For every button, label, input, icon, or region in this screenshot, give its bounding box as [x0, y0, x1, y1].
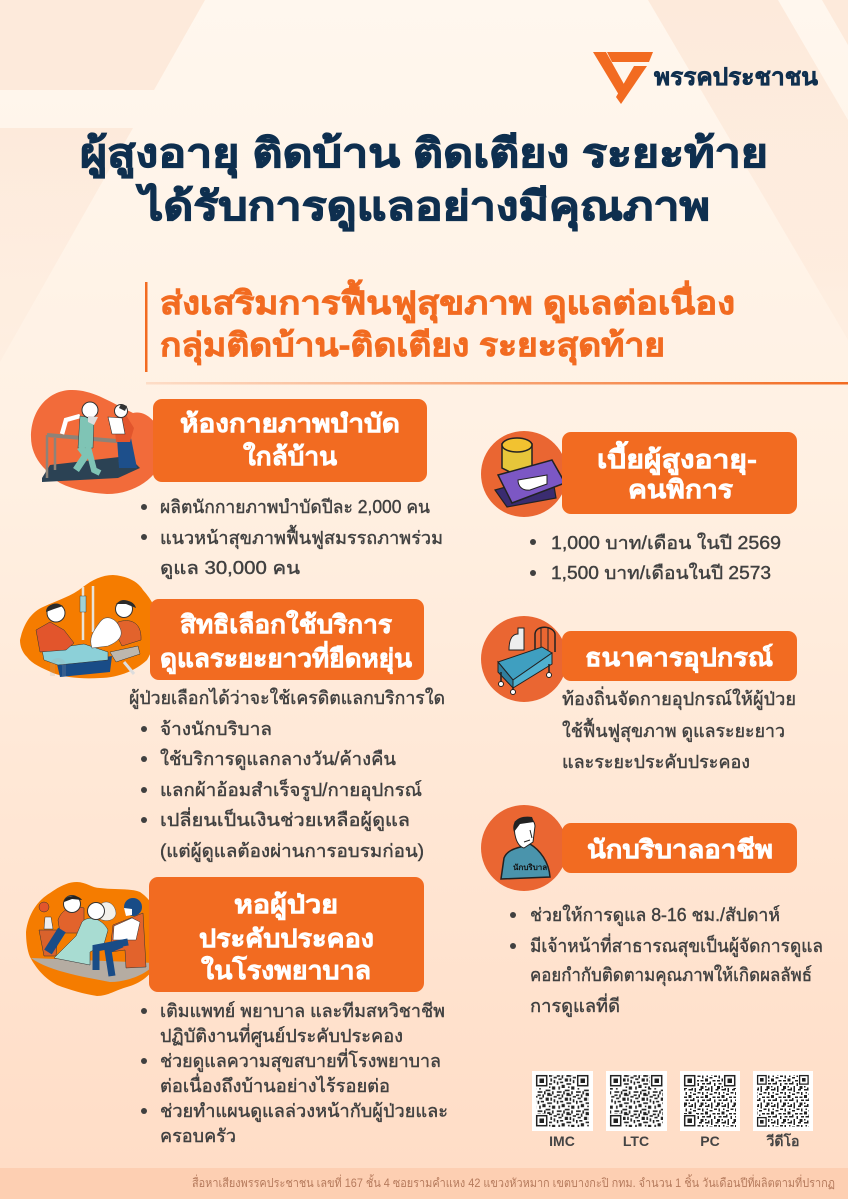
description — [562, 686, 796, 772]
icon: hospital bed — [481, 616, 567, 702]
icon: treadmill rehab — [31, 390, 163, 494]
heading box: ใกล้บ้าน — [243, 441, 337, 471]
heading box: ธนาคารอุปกรณ์ — [585, 643, 773, 674]
bullet list: ช่วยดูแลความสุขสบายที่โรงพยาบาล — [160, 1048, 441, 1072]
bullet list: ช่วยทำแผนดูแลล่วงหน้ากับผู้ป่วยและ — [160, 1101, 448, 1122]
bullet list: มีเจ้าหน้าที่สาธารณสุขเป็นผู้จัดการดูแล — [530, 933, 823, 957]
bullet list: ดูแล 30,000 คน — [160, 558, 300, 579]
intro and bullet list: ใช้บริการดูแลกลางวัน/ค้างคืน — [160, 748, 396, 770]
intro and bullet list: เปลี่ยนเป็นเงินช่วยเหลือผู้ดูแล — [160, 807, 410, 831]
logo: People's Party — [593, 52, 819, 104]
QR code: IMC — [532, 1071, 593, 1149]
heading box — [562, 631, 797, 681]
bullet list: 1,500 บาท/เดือนในปี 2573 — [551, 562, 771, 583]
description: และระยะประคับประคอง — [562, 752, 750, 772]
QR code: PC — [680, 1071, 740, 1149]
heading box — [562, 432, 797, 514]
panel: palliative ward — [26, 877, 448, 1146]
description: ท้องถิ่นจัดกายอุปกรณ์ให้ผู้ป่วย — [562, 686, 796, 710]
subtitle with accent bar — [145, 279, 735, 372]
title: ผู้สูงอายุ ติดบ้าน ติดเตียง ระยะท้าย — [80, 132, 768, 179]
bullet list: ต่อเนื่องถึงบ้านอย่างไร้รอยต่อ — [160, 1073, 390, 1096]
icon: caregiver portrait — [481, 805, 567, 891]
description: ใช้ฟื้นฟูสุขภาพ ดูแลระยะยาว — [562, 718, 785, 742]
intro and bullet list — [129, 687, 445, 862]
title: ได้รับการดูแลอย่างมีคุณภาพ — [135, 183, 710, 232]
heading box: ห้องกายภาพบำบัด — [180, 410, 400, 438]
bullet list — [141, 497, 443, 579]
heading box: คนพิการ — [628, 476, 734, 504]
bullet list: คอยกำกับติดตามคุณภาพให้เกิดผลลัพธ์ — [530, 964, 812, 986]
QR code: LTC: LTC — [623, 1133, 649, 1149]
bullet list: เติมแพทย์ พยาบาล และทีมสหวิชาชีพ — [160, 1001, 445, 1021]
panel: elderly allowance — [481, 431, 797, 583]
subtitle with accent bar: กลุ่มติดบ้าน-ติดเตียง ระยะสุดท้าย — [160, 327, 665, 366]
icon: coins and banknotes — [481, 431, 567, 517]
heading box: หอผู้ป่วย — [234, 891, 338, 921]
title — [80, 132, 768, 232]
bullet list: แนวหน้าสุขภาพฟื้นฟูสมรรถภาพร่วม — [160, 525, 443, 549]
QR code: LTC — [606, 1071, 667, 1149]
bullet list: ผลิตนักกายภาพบำบัดปีละ 2,000 คน — [160, 497, 430, 517]
intro and bullet list: จ้างนักบริบาล — [160, 719, 272, 739]
bullet list: ครอบครัว — [160, 1126, 236, 1146]
bullet list — [141, 1001, 448, 1146]
panel: flexible long-term care — [20, 575, 445, 862]
icon: family on sofa — [26, 882, 159, 996]
bullet list: การดูแลที่ดี — [530, 993, 620, 1017]
panel: physiotherapy room — [31, 390, 443, 579]
heading box — [150, 599, 424, 680]
heading box: ในโรงพยาบาล — [201, 955, 371, 985]
QR code: PC: PC — [700, 1133, 720, 1149]
intro and bullet list: ผู้ป่วยเลือกได้ว่าจะใช้เครดิตแลกบริการใด — [129, 687, 445, 709]
footer — [0, 1168, 848, 1199]
heading box: ดูแลระยะยาวที่ยืดหยุ่น — [160, 641, 412, 675]
icon: caregiver portrait: นักบริบาล — [513, 863, 547, 872]
bullet list: ปฏิบัติงานที่ศูนย์ประคับประคอง — [160, 1023, 403, 1047]
intro and bullet list: แลกผ้าอ้อมสำเร็จรูป/กายอุปกรณ์ — [160, 778, 422, 801]
panel: equipment bank — [481, 616, 797, 772]
QR code: video — [753, 1071, 813, 1149]
heading box — [153, 399, 427, 482]
bullet list: ช่วยให้การดูแล 8-16 ชม./สัปดาห์ — [530, 904, 780, 926]
intro and bullet list: (แต่ผู้ดูแลต้องผ่านการอบรมก่อน) — [160, 841, 424, 862]
heading box: เบี้ยผู้สูงอายุ- — [597, 440, 757, 476]
subtitle with accent bar: ส่งเสริมการฟื้นฟูสุขภาพ ดูแลต่อเนื่อง — [160, 279, 735, 324]
icon: bed care — [20, 575, 157, 678]
QR code: IMC: IMC — [549, 1133, 575, 1149]
heading box — [149, 877, 424, 992]
bullet list: 1,000 บาท/เดือน ในปี 2569 — [551, 532, 781, 553]
bullet list — [530, 532, 781, 583]
heading box: นักบริบาลอาชีพ — [587, 836, 773, 864]
heading box: สิทธิเลือกใช้บริการ — [180, 609, 393, 639]
heading box — [562, 823, 797, 873]
bullet list — [510, 904, 823, 1017]
panel: professional caregiver — [481, 805, 823, 1017]
QR code: video: วีดีโอ — [765, 1132, 799, 1149]
heading box: ประคับประคอง — [199, 925, 374, 953]
logo: People's Party: พรรคประชาชน — [654, 64, 819, 91]
